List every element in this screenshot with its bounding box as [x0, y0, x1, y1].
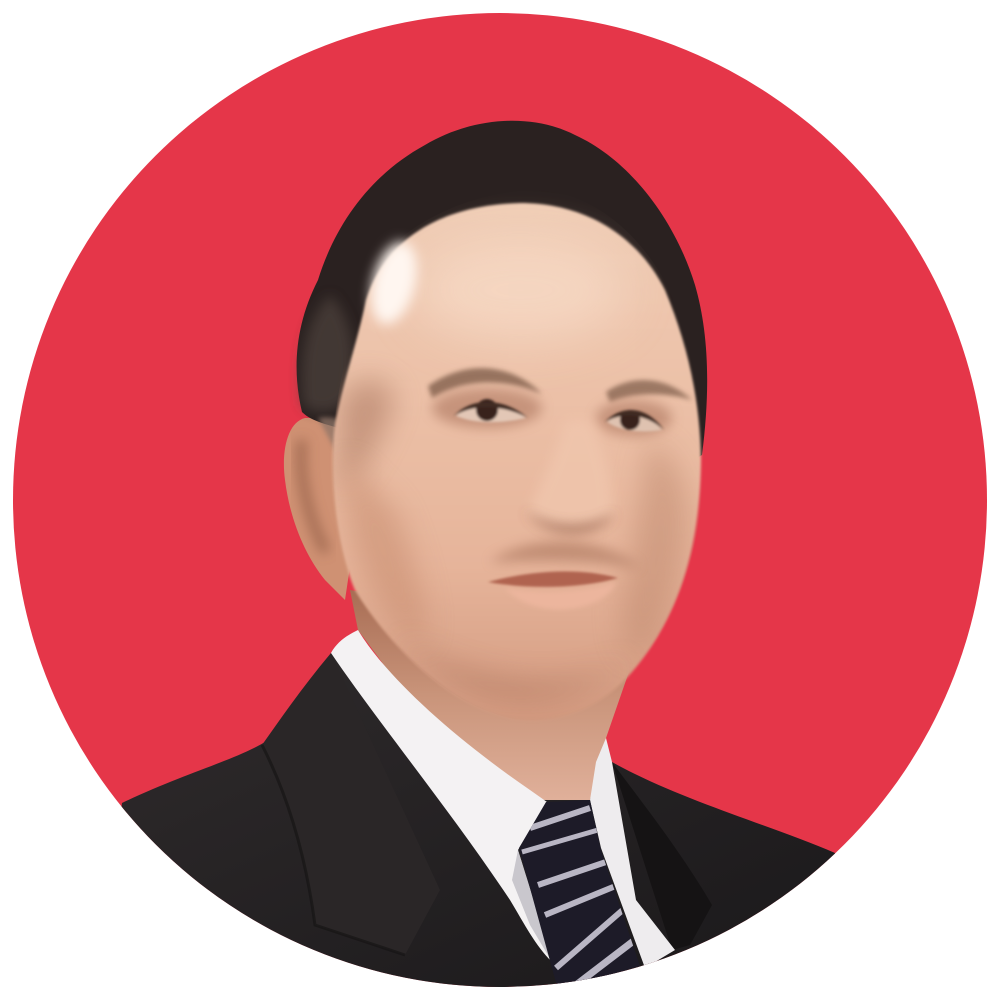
face shading: jaw [427, 656, 582, 704]
jacket lapel left [263, 653, 416, 954]
striped tie [519, 800, 640, 984]
nose shadow [525, 510, 615, 533]
right brow [606, 380, 692, 402]
mouth [488, 571, 618, 587]
lower lip [517, 586, 611, 608]
figure [100, 121, 835, 1000]
left brow [428, 368, 542, 398]
ear [284, 418, 350, 600]
face shading: right cheek [622, 440, 688, 654]
suit jacket [100, 653, 835, 1000]
neck [350, 590, 640, 800]
forehead glow [415, 240, 625, 340]
face shading: temple [340, 379, 395, 490]
forehead highlight [363, 237, 425, 329]
right eye socket [596, 400, 672, 436]
face [333, 203, 701, 720]
white shirt collar [331, 630, 675, 968]
left eye [454, 399, 528, 422]
right eye [605, 410, 664, 431]
philtrum and smile shade [490, 541, 640, 568]
nose [535, 450, 610, 522]
hair [297, 121, 707, 480]
left eye socket [432, 388, 542, 428]
jacket lapel right [612, 762, 712, 950]
face shading: left cheek [344, 460, 425, 643]
